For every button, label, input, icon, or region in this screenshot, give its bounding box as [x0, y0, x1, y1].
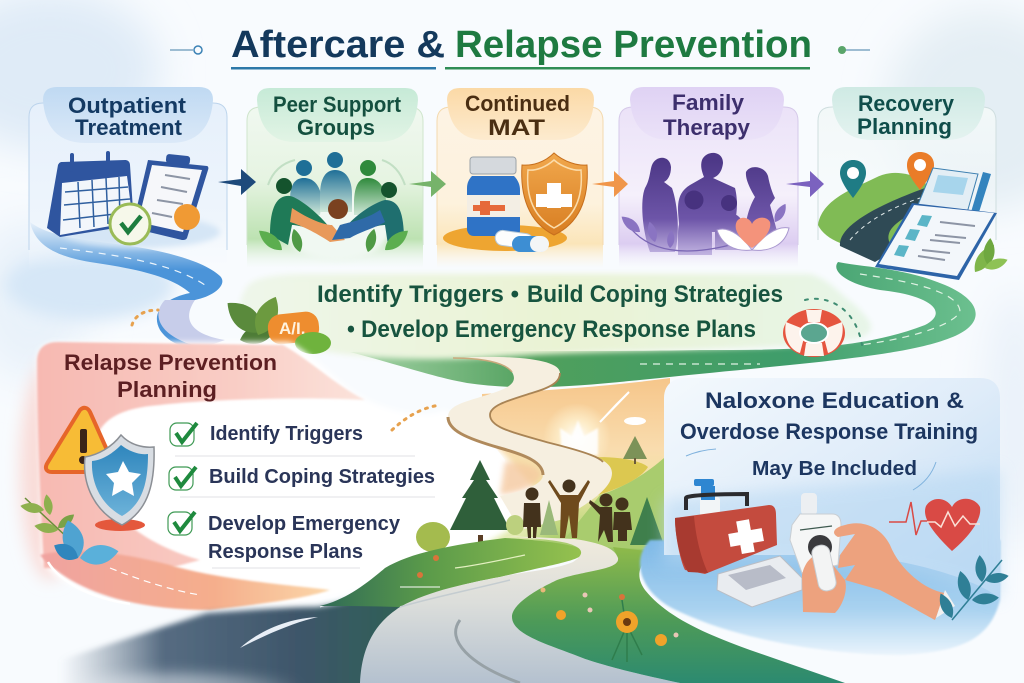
panel: key strategies band	[240, 274, 871, 359]
icon: pill bottle on plate	[443, 157, 567, 251]
icon: heart with leaves	[619, 202, 789, 251]
check two	[169, 467, 196, 490]
road: blue ribbon from outpatient card	[5, 222, 225, 348]
grass: left lawn	[320, 538, 583, 607]
trees and shrubs	[416, 460, 664, 553]
winding pale path: upper bends	[448, 357, 612, 530]
icon: map with road	[818, 173, 935, 262]
strategy line two: • Develop Emergency Response Plans	[347, 316, 756, 343]
arrow: MAT to family	[592, 171, 628, 197]
icon: training pad	[717, 556, 802, 607]
icon: evergreen tree	[450, 460, 510, 553]
icon: location pins	[840, 152, 934, 198]
icon: leaves	[970, 238, 1009, 276]
icon: leaves	[20, 494, 120, 567]
panel: peer support groups	[247, 88, 423, 268]
arrow: peer to MAT	[409, 171, 446, 197]
icon: checklist	[875, 203, 997, 280]
heading pill	[257, 88, 418, 142]
card title: Groups	[297, 115, 375, 140]
panel: relapse prevention planning	[20, 342, 545, 610]
card title	[273, 92, 402, 140]
checklist: Develop Emergency	[208, 513, 401, 535]
panel text: Naloxone Education &	[705, 388, 964, 413]
icon: first aid kit	[675, 494, 777, 574]
icon: orange shield	[522, 153, 587, 235]
panel: continued MAT	[437, 88, 603, 268]
icon: lifebuoy	[783, 299, 862, 357]
card title: Planning	[857, 114, 952, 139]
icon: hands	[802, 523, 955, 620]
icon: notebook	[915, 168, 991, 225]
check three	[168, 512, 195, 535]
checklist: Identify Triggers	[210, 423, 363, 445]
card title: Peer Support	[273, 92, 402, 117]
pink road	[40, 551, 330, 610]
sunrise valley	[470, 378, 670, 556]
card title	[465, 91, 570, 140]
winding pale path: lower bend	[360, 536, 680, 683]
card title	[857, 91, 955, 139]
panel heading	[64, 350, 277, 402]
panel text: Overdose Response Training	[680, 419, 978, 444]
panel: naloxone education	[640, 378, 1009, 655]
icon: people silhouettes	[523, 480, 632, 542]
card title: Therapy	[663, 115, 751, 140]
icon: naloxone device	[790, 493, 841, 573]
icon: clipboard	[132, 154, 208, 240]
heading pill	[447, 88, 594, 140]
icon: spray bottle	[694, 479, 720, 527]
heading pill	[832, 87, 985, 140]
icon: support circle	[255, 152, 412, 261]
icon: heart with pulse	[889, 499, 980, 551]
icon: capsules	[494, 229, 549, 252]
heading pill	[630, 87, 784, 140]
checklist: Build Coping Strategies	[209, 466, 435, 488]
card title: Continued	[465, 91, 570, 116]
water	[640, 540, 1000, 655]
foreground dark road	[60, 585, 445, 683]
card title: MAT	[488, 115, 546, 140]
title text: Aftercare &	[231, 24, 445, 66]
icon: calendar	[47, 153, 134, 237]
card title: Family	[672, 90, 745, 115]
icon: teal sprig	[936, 555, 1009, 620]
check one	[170, 423, 197, 446]
panel heading: Relapse Prevention	[64, 350, 277, 375]
panel text	[680, 388, 978, 480]
icon: warning triangle	[46, 408, 110, 472]
panel text: May Be Included	[752, 458, 917, 480]
title text: Relapse Prevention	[455, 24, 812, 66]
strategy line one: Build Coping Strategies	[527, 281, 783, 308]
icon: family silhouettes	[642, 153, 778, 255]
panel: recovery planning	[818, 87, 1009, 280]
flowers	[540, 588, 678, 662]
icon: herb leaves and pill: A/I.	[279, 319, 305, 338]
panel heading: Planning	[117, 377, 217, 402]
checklist	[168, 423, 435, 568]
arrow: family to recovery	[786, 171, 824, 197]
icon: blue shield	[85, 435, 154, 531]
checklist: Response Plans	[208, 541, 363, 563]
icon: check badge	[110, 204, 150, 244]
panel: family therapy	[619, 87, 798, 268]
card title: Outpatient	[68, 93, 187, 118]
card title	[68, 93, 187, 140]
icon: herb leaves and pill	[132, 293, 331, 354]
green winding road	[350, 262, 976, 387]
heading pill	[43, 87, 213, 143]
grass: right meadow	[512, 547, 845, 683]
card title	[663, 90, 751, 140]
arrow: outpatient to peer	[218, 169, 256, 195]
title	[170, 24, 870, 70]
card title: Treatment	[75, 115, 183, 140]
card title: Recovery	[858, 91, 955, 116]
panel: outpatient treatment	[29, 87, 227, 270]
strategy line one: Identify Triggers •	[317, 281, 519, 308]
